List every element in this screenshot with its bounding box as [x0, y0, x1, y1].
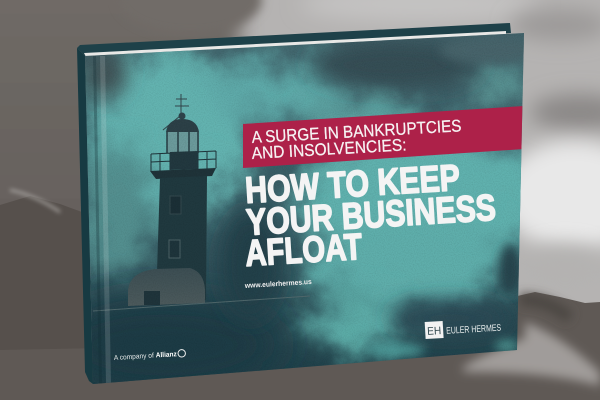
cover: band heading: A SURGE IN BANKRUPTCIES	[251, 116, 462, 147]
cover: band heading: AND INSOLVENCIES:	[251, 135, 407, 163]
cover: main title: HOW TO KEEP	[244, 157, 461, 211]
cover: red title band	[243, 106, 524, 168]
lighthouse: gallery railing	[151, 151, 216, 171]
lighthouse: pier line	[93, 296, 310, 311]
book: spine edge	[77, 48, 93, 384]
cover: bright teal spray	[85, 45, 255, 225]
lighthouse: tower	[156, 176, 207, 304]
cover: lighthouse	[93, 94, 310, 311]
cover: company of Allianz	[114, 349, 186, 362]
cover: band heading	[252, 120, 461, 160]
lighthouse: base building	[128, 268, 205, 306]
cover: main title: AFLOAT	[244, 226, 364, 274]
lighthouse: lantern room	[167, 132, 199, 153]
book: front cover	[85, 33, 524, 384]
cover: company of Allianz: A company of	[114, 353, 154, 362]
book: back cover top edge	[77, 23, 511, 56]
cover: company of Allianz: Allianz	[156, 351, 177, 359]
cover: website: www.eulerhermes.us	[244, 277, 312, 290]
cover: texture grain	[86, 36, 524, 359]
cover: Euler Hermes logo	[424, 321, 501, 339]
lighthouse: weather vane	[163, 94, 189, 130]
cover: darker bottom clouds	[91, 282, 269, 384]
cover: spine hinge highlights	[100, 56, 111, 384]
book: white page block	[84, 31, 506, 57]
cover: Euler Hermes logo: EH	[427, 325, 442, 338]
cover: dark storm top right	[310, 41, 480, 89]
background: dark sea	[0, 190, 600, 400]
cover: Euler Hermes logo: EULER HERMES	[446, 323, 501, 337]
cover: main title: YOUR BUSINESS	[245, 187, 497, 243]
cover: main title	[245, 164, 496, 267]
lighthouse: dome	[166, 119, 199, 132]
